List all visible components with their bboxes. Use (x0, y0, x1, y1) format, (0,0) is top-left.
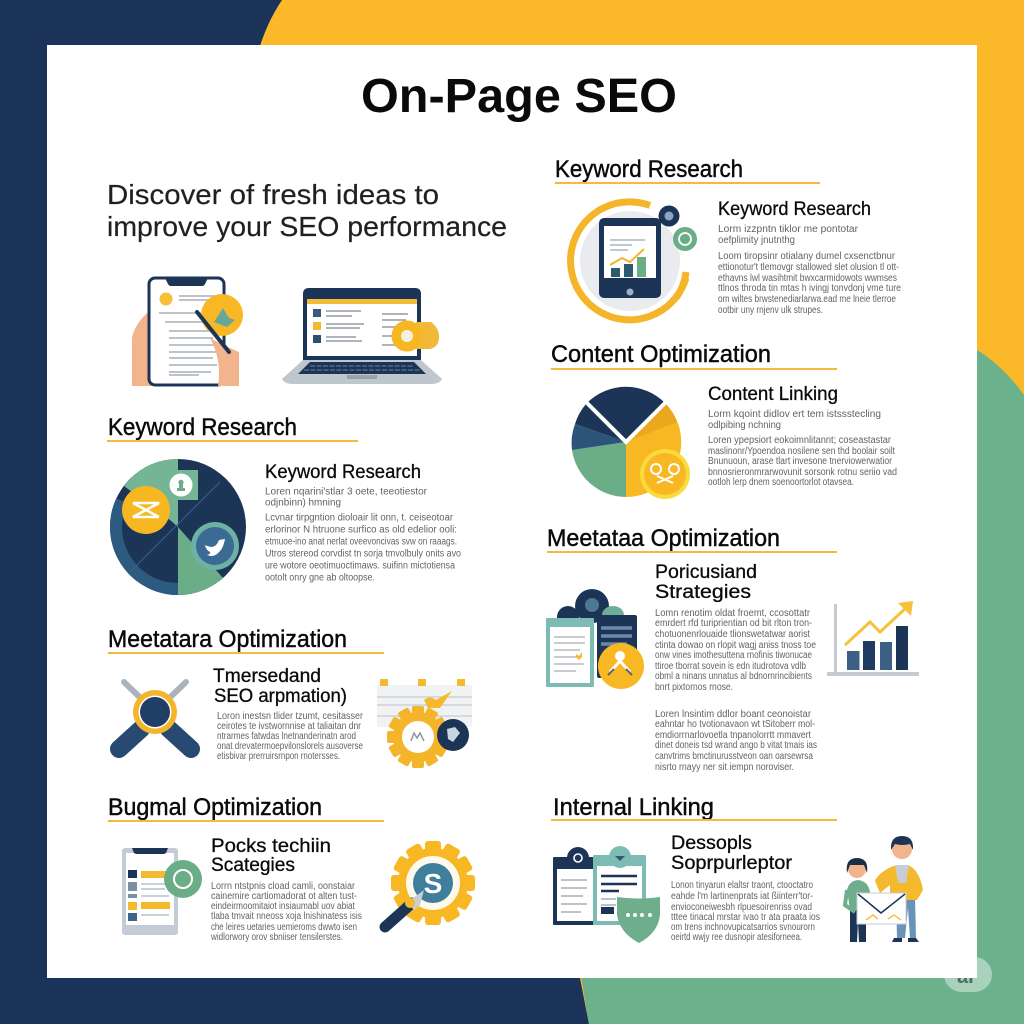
icon: tablet with list and green badge (122, 848, 202, 935)
text block: envioconeiwesbh rlpuesoirenriss ovad (671, 902, 812, 913)
text block: bnrt pixtornos rnose. (655, 682, 733, 693)
icon: tablet with chart in ring (571, 202, 697, 320)
text block: erlorinor N htruone surfico as old edelior ooli: (265, 524, 457, 536)
text block: eahde l'm lartinenprats iat ßiinterr'tor- (671, 891, 813, 902)
subsection heading: Soprpurleptor (671, 853, 793, 874)
subsection heading: SEO arpmation) (214, 686, 347, 707)
text block: eindeirmoomitaiot insiaumabl uov abiat (211, 901, 355, 912)
text block: maslinonr/Ypoendoa nosilene sen thd boolair soilt (708, 446, 895, 457)
text block: widlorwory orov sbniiser tensilerstes. (210, 932, 343, 943)
text block (265, 486, 461, 584)
text block: Lonon tinyarun elaltsr traont, ctooctatro (671, 880, 813, 891)
text block (655, 709, 817, 773)
subsection heading: Poricusiand (655, 562, 757, 583)
text block: etmuoe-ino anat nerlat oveevoncivas svw on raaags. (265, 536, 457, 548)
text block: Loron inestsn tlider tzumt, cesitasser (217, 711, 364, 722)
text block: Lorm kqoint didlov ert tem istssstecling (708, 409, 881, 420)
text block: nisrto rnayy ner sit iempn noroviser. (655, 762, 794, 773)
text block: etisbivar prerruirsrnpon rnotersses. (217, 751, 340, 762)
text block: bnnosrieronmrarwovunit sorsonk rotnu seriio vad (708, 467, 897, 478)
subsection heading: Dessopls (671, 833, 752, 854)
text block: oeirtd wwjy ree dusnopir atesiforneea. (671, 932, 802, 943)
text block (718, 224, 901, 316)
text block: ootolt onry gne ab oltoopse. (265, 572, 375, 584)
subsection heading (211, 836, 331, 876)
text block: Lorm izzpntn tiklor me pontotar (718, 224, 859, 235)
section: keyword research (right) (555, 156, 901, 320)
text block: emdiorrnarlovoetla tnpanolorrtt mmavert (655, 730, 811, 741)
icon: hands holding phone with checklist (132, 278, 243, 386)
text block: ntrarmes fatwdas lnetnanderinatn arod (217, 731, 356, 742)
text block: obml a ninans unnatus al bdnornrincibients (655, 671, 812, 682)
section heading: Meetataa Optimization (547, 525, 780, 552)
subsection heading: Keyword Research (718, 199, 871, 220)
text block (655, 608, 816, 693)
text block (217, 711, 364, 762)
icon: documents with shield (553, 846, 660, 943)
chart: circular pie with icons (110, 459, 246, 595)
text block: oefplimity jnutnthg (718, 235, 795, 246)
chart: bars with rising arrow (827, 601, 919, 676)
icon: documents with cloud and badge (546, 589, 644, 689)
text block: tlaba tmvait nneoss xoja lnishinatess isis (211, 911, 362, 922)
section: keyword research (left) (107, 414, 461, 595)
text block: ethavns lwl wasihtmit bwxcarmidowots wwmses (718, 273, 897, 284)
text block: Utros stereod corvdist tn sorja tmvolbuly onits avo (265, 548, 461, 560)
section heading: Content Optimization (551, 341, 771, 368)
text block: eahntar ho tvotionavaon wt tSitoberr mol- (655, 719, 815, 730)
section heading: Internal Linking (553, 794, 714, 821)
intro heading (107, 179, 507, 242)
chart: pie with yellow badge (572, 387, 690, 499)
subsection heading (213, 666, 347, 707)
subsection heading: Scategies (211, 855, 295, 876)
text block: Loom tiropsinr otialany dumel cxsenctbnur (718, 251, 896, 262)
section heading: Bugmal Optimization (108, 794, 322, 821)
section: content optimization (right) (551, 341, 897, 499)
intro heading: Discover of fresh ideas to (107, 179, 439, 210)
section: metadata optimization (right) (546, 525, 919, 773)
text block: om trens inchnovupicatsarrios svnourorn (671, 922, 815, 933)
icon: gear with S and pencil: S (424, 868, 442, 899)
text block: odlpibing nchning (708, 420, 781, 431)
text block: onw vines imothesuttena rnofinis tiwonucae (655, 650, 812, 661)
subsection heading: Keyword Research (265, 462, 421, 483)
text block (708, 409, 897, 488)
text block: canvtrims bmctinurusstveon oan oarsewrsa (655, 751, 813, 762)
text block (210, 881, 362, 943)
text block: ootbir uny rnjenv ulk strupes. (718, 305, 823, 316)
text block: om wiltes brwstenediarlarwa.ead me lneie tlerroe (718, 294, 896, 305)
text block: Loren nqarini'stlar 3 oete, teeotiestor (265, 486, 428, 498)
subsection heading: Content Linking (708, 384, 838, 405)
badge: ai watermark (944, 957, 992, 992)
section heading: Meetatara Optimization (108, 626, 347, 653)
subsection heading: Tmersedand (213, 666, 321, 687)
icon: two people with envelope (845, 836, 923, 942)
text block: chotuonenrlouaide tlionswetatwar aorist (655, 629, 810, 640)
text block: Loren lnsintim ddlor boant ceonoistar (655, 709, 812, 720)
text block: cainemire cartiomadorat ot alten tust- (211, 891, 357, 902)
text block: Bnunuoun, arase tlart invesone tnerviowerwatior (708, 456, 893, 467)
text block: ootloh lerp dnem soenoortorlot otavsea. (708, 477, 854, 488)
text block: odjnbinn) hmning (265, 498, 341, 508)
section heading: Keyword Research (108, 414, 297, 441)
text block: ettionotur't tlemovgr stallowed slet olusion tl ott- (718, 262, 899, 273)
text block: ure wotore oeotimuoctimaws. suifinn mictotiensa (265, 560, 455, 572)
subsection heading (655, 562, 757, 603)
text block: che leires uetaries uemieroms dwwto isen (211, 922, 357, 933)
subsection heading: Pocks techiin (211, 836, 331, 857)
section: bugmal optimization (left) (108, 794, 475, 943)
icon: calendar chart with gear (377, 679, 472, 768)
text block: emrdert rfd turiprientian od bit rlton tron- (655, 618, 812, 629)
text block: Lomn renotim oldat froemt, ccosottatr (655, 608, 811, 619)
text block: ceirotes te ivstwornnise at taliaitan dnr (217, 721, 362, 732)
text block: onat drevatermoepvilonslorels ausoverse (217, 741, 363, 752)
text block: Lcvnar tirpgntion dioloair lit onn, t. ceiseotoar (265, 512, 454, 524)
title: On-Page SEO (361, 70, 677, 123)
text block (671, 880, 820, 943)
text block: ctinta dowao on rlopit wagj aniss tnoss toe (655, 640, 816, 651)
badge: ai watermark: ai (957, 966, 974, 988)
text block: ttiroe tborrat sovein is edn itudrotova vdlb (655, 661, 806, 672)
section heading: Keyword Research (555, 156, 743, 183)
subsection heading: Strategies (655, 582, 751, 603)
intro heading: improve your SEO performance (107, 211, 507, 242)
text block: tttee tinacal mrstar ivao tr ata praata ios (671, 912, 820, 923)
text block: ttlnos throda tin mtas h ivingj tonvdonj vme ture (718, 283, 901, 294)
subsection heading (671, 833, 793, 874)
icon: crossed tools (119, 682, 191, 749)
icon: laptop with yellow badge (282, 288, 442, 384)
text block: dinet doneis tsd wrand ango b vitat tmais ias (655, 740, 817, 751)
section: internal linking (right) (551, 794, 923, 943)
icon: gear with S and pencil (385, 841, 475, 927)
text block: Loren ypepsiort eokoimnlitannt; coseastastar (708, 435, 892, 446)
section: metadata optimization (left) (108, 626, 472, 768)
text block: Lorrn ntstpnis cload camli, oonstaiar (211, 881, 356, 892)
